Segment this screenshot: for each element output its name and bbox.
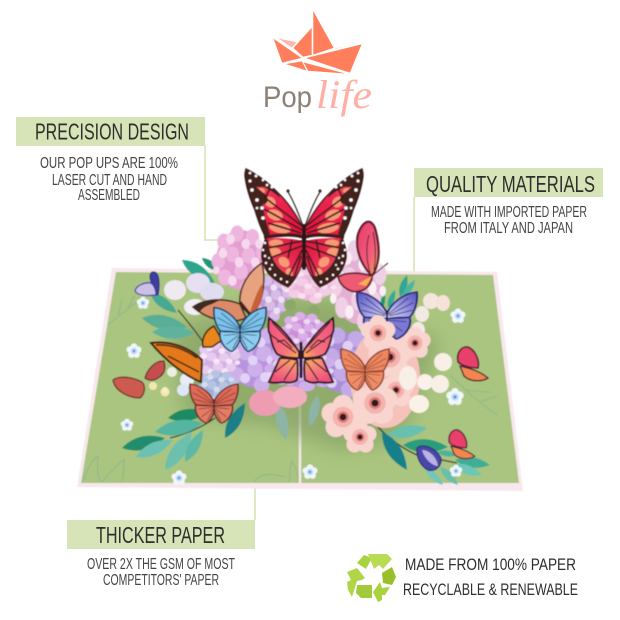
left wings <box>268 318 299 383</box>
petals behind main butterfly <box>282 267 337 304</box>
wordmark: Pop: Pop <box>263 81 312 114</box>
white and cream buds, left <box>149 367 194 396</box>
butterfly: pink side view lower right <box>449 430 475 459</box>
icon: origami boat <box>273 10 362 74</box>
green gaps between blooms <box>284 299 320 317</box>
flowers: pink centre <box>249 386 307 416</box>
hydrangea: blue-grey <box>196 370 239 407</box>
butterfly: orange-brown <box>193 263 264 321</box>
pink flower over violet butterfly <box>361 315 395 349</box>
white blossoms, lower right <box>399 353 452 413</box>
leaves and branches <box>120 255 491 488</box>
panel: precision design <box>16 117 232 240</box>
card: green pages <box>81 272 519 483</box>
hydrangea: purple, under centre butterfly <box>264 346 334 391</box>
icon: recycling arrows <box>347 554 396 602</box>
body text: COMPETITORS' PAPER <box>103 572 219 589</box>
body text <box>431 204 587 237</box>
body text <box>40 155 178 204</box>
illustration: open pop-up card <box>77 169 523 491</box>
logo: Poplife <box>263 10 372 117</box>
butterfly: pink side view upper right <box>338 222 388 292</box>
left wings <box>244 169 303 287</box>
butterfly: coral right <box>341 349 389 390</box>
butterfly: red left <box>113 361 165 398</box>
forewing and hindwing outline <box>328 169 364 236</box>
text: MADE FROM 100% PAPER <box>405 555 576 574</box>
heading: THICKER PAPER <box>96 522 225 548</box>
hydrangea: purple, left of centre <box>221 324 288 393</box>
body text: ASSEMBLED <box>78 187 140 204</box>
heading band <box>16 117 205 146</box>
text <box>403 555 578 599</box>
flowers: pink poppies <box>322 327 431 452</box>
white blossoms, upper right <box>411 293 450 338</box>
small blue-white flowers <box>121 297 465 485</box>
hydrangea: purple, right of centre <box>306 328 376 398</box>
hydrangea: pale lilac, far left <box>195 340 240 380</box>
white blossoms, upper left <box>164 273 224 315</box>
body text: FROM ITALY AND JAPAN <box>444 220 573 237</box>
hydrangea: pink, upper left <box>212 226 270 296</box>
right wings <box>303 318 334 383</box>
heading: PRECISION DESIGN <box>35 118 189 144</box>
body text: OVER 2X THE GSM OF MOST <box>87 556 235 573</box>
body and antennae <box>302 226 306 268</box>
body text: OUR POP UPS ARE 100% <box>40 155 178 172</box>
butterfly: red lower centre <box>190 384 238 423</box>
heading band <box>67 520 255 549</box>
body text: LASER CUT AND HAND <box>52 172 167 189</box>
butterfly: sky blue <box>214 308 266 352</box>
card: pink edge <box>77 268 523 491</box>
right wings <box>305 169 364 287</box>
body <box>300 342 302 378</box>
card: pop-up shadow <box>170 300 440 450</box>
butterfly: large monarch <box>244 169 364 287</box>
butterfly: purple, top left <box>135 272 159 296</box>
butterfly: monarch orange <box>151 326 222 382</box>
butterfly: pink side view right <box>458 347 488 381</box>
hydrangea: pale pink, right <box>329 240 386 332</box>
hydrangea: lilac, upper left <box>247 276 292 321</box>
line-drawn sprigs <box>83 295 497 482</box>
panel: thicker paper <box>67 486 255 589</box>
hydrangea: rose-lilac, above centre butterfly <box>280 312 326 349</box>
butterfly: pink and orange centre <box>268 318 334 383</box>
body text <box>87 556 235 589</box>
heading band <box>414 168 603 197</box>
card: centre fold <box>299 400 301 486</box>
butterfly: purple lower right <box>417 446 441 470</box>
panel: recyclable paper <box>347 554 578 602</box>
wordmark: life: life <box>316 72 372 117</box>
butterfly: violet right <box>357 292 417 339</box>
panel: quality materials <box>414 168 603 273</box>
